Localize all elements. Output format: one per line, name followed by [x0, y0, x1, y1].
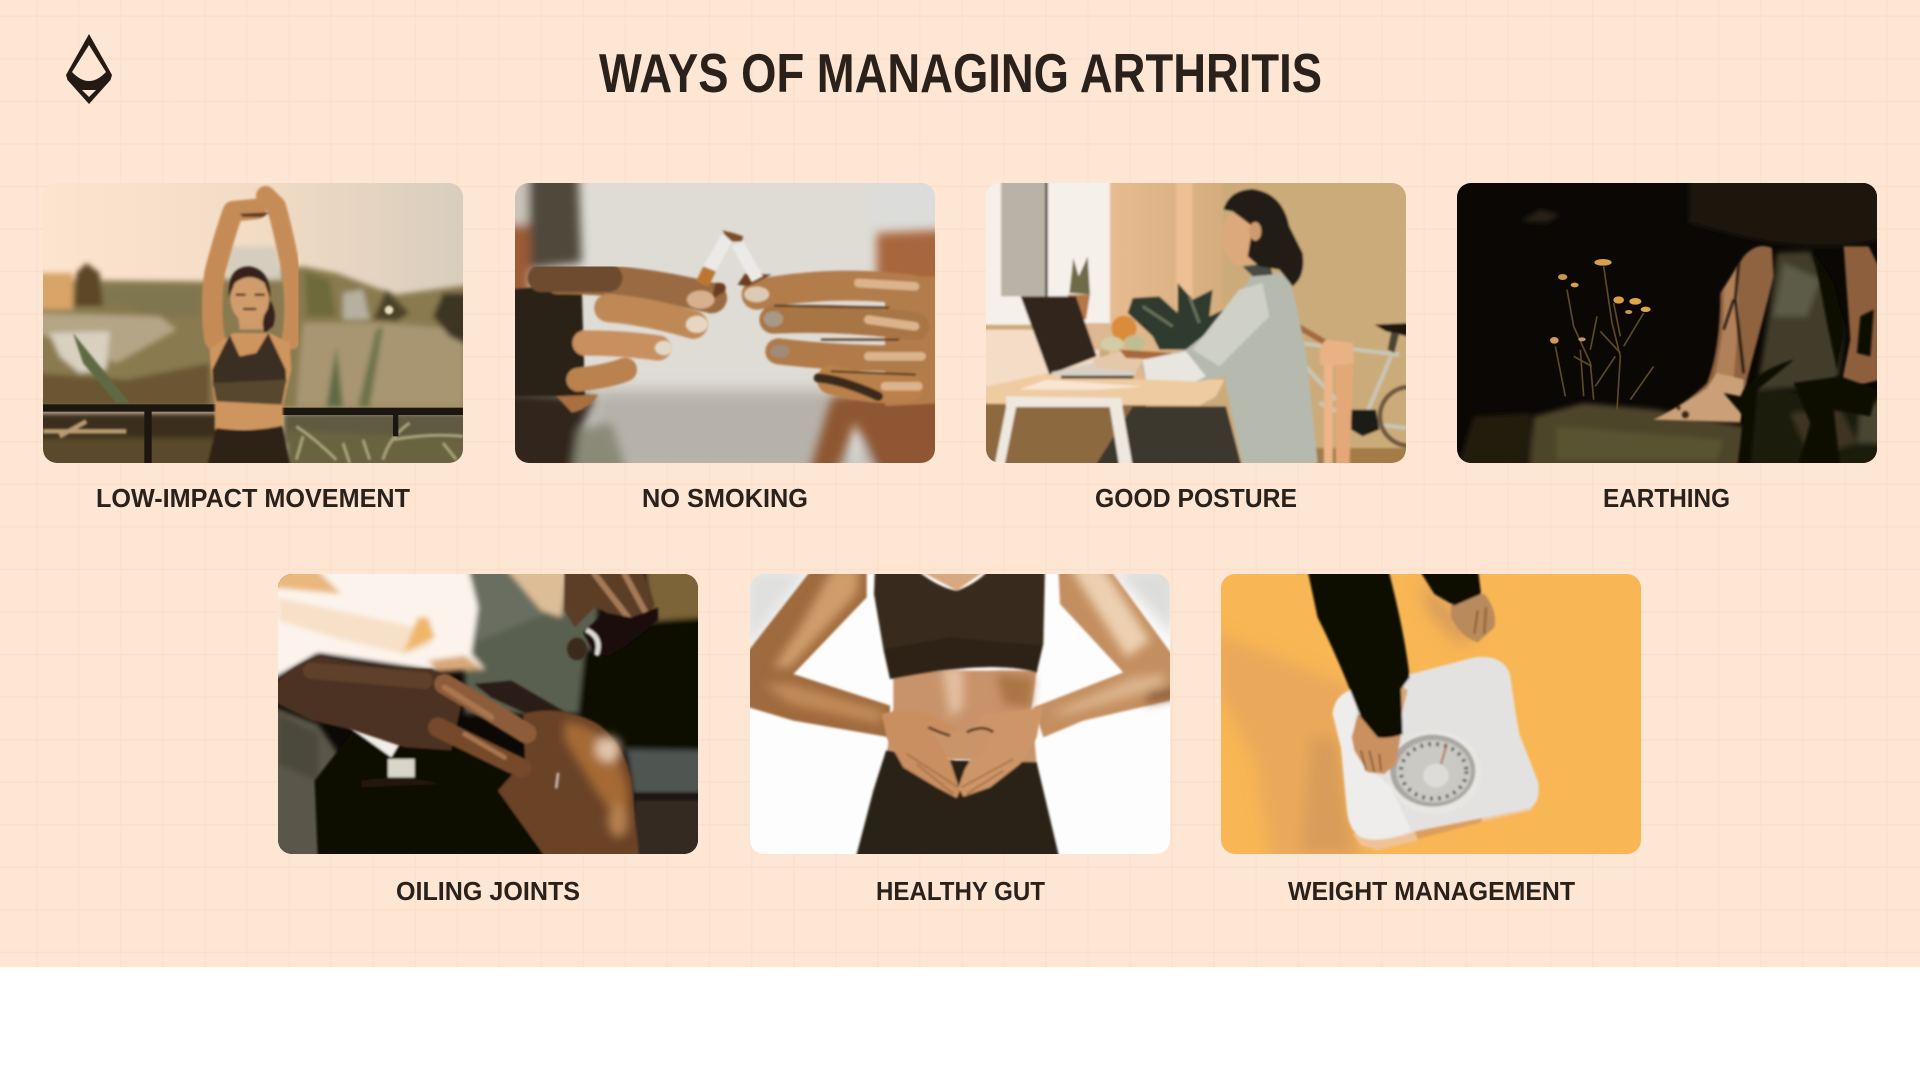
- panel: low-impact movement: [36, 180, 470, 513]
- arms: [212, 209, 256, 340]
- leggings: [855, 751, 1060, 861]
- near leg: [1307, 567, 1410, 738]
- icon: logo: [66, 34, 112, 104]
- photo: hands breaking cigarette: [515, 183, 935, 463]
- panel: no smoking: [515, 183, 935, 508]
- panel: earthing: [1454, 176, 1884, 513]
- hand with bottle: [565, 567, 655, 627]
- plant and fruit: [1068, 295, 1090, 320]
- photo: oil poured on knee: [271, 567, 705, 861]
- label: HEALTHY GUT: [876, 876, 1045, 906]
- thigh dark: [315, 721, 545, 861]
- far leg and foot: [1451, 594, 1495, 642]
- woman: [1141, 273, 1318, 466]
- panel: good posture: [986, 183, 1406, 508]
- arms: [743, 567, 890, 737]
- flowers: [1550, 259, 1654, 410]
- label: GOOD POSTURE: [1095, 483, 1297, 513]
- photo: hands in heart shape on belly: [743, 567, 1177, 861]
- panel: oiling joints: [271, 567, 705, 906]
- photo: foot on bathroom scale: [1214, 567, 1644, 861]
- panel: healthy gut: [743, 567, 1177, 906]
- bicycle: [1298, 343, 1406, 428]
- laptop: [1021, 296, 1097, 375]
- title: WAYS OF MANAGING ARTHRITIS: [599, 42, 1322, 104]
- label: LOW-IMPACT MOVEMENT: [96, 483, 410, 513]
- desk: [979, 374, 1224, 406]
- knee: [498, 711, 640, 861]
- railing: [43, 404, 216, 412]
- label: NO SMOKING: [642, 483, 808, 513]
- shorts band: [475, 681, 571, 717]
- scale base: [1353, 827, 1418, 850]
- photo: woman stretching: [36, 180, 470, 470]
- scale body: [1333, 657, 1539, 840]
- photo: woman at desk: [986, 183, 1406, 463]
- hand: [275, 656, 465, 751]
- bra: [874, 567, 1045, 679]
- dark foreground grass: [1724, 251, 1877, 470]
- chair: [1320, 340, 1354, 366]
- photo: bare foot on grass: [1454, 176, 1884, 470]
- near foot: [1352, 714, 1401, 774]
- label: EARTHING: [1603, 483, 1730, 513]
- label: OILING JOINTS: [396, 876, 580, 906]
- label: WEIGHT MANAGEMENT: [1288, 876, 1575, 906]
- torso: [887, 671, 1037, 764]
- hands: [882, 711, 960, 798]
- panel: weight management: [1214, 567, 1644, 906]
